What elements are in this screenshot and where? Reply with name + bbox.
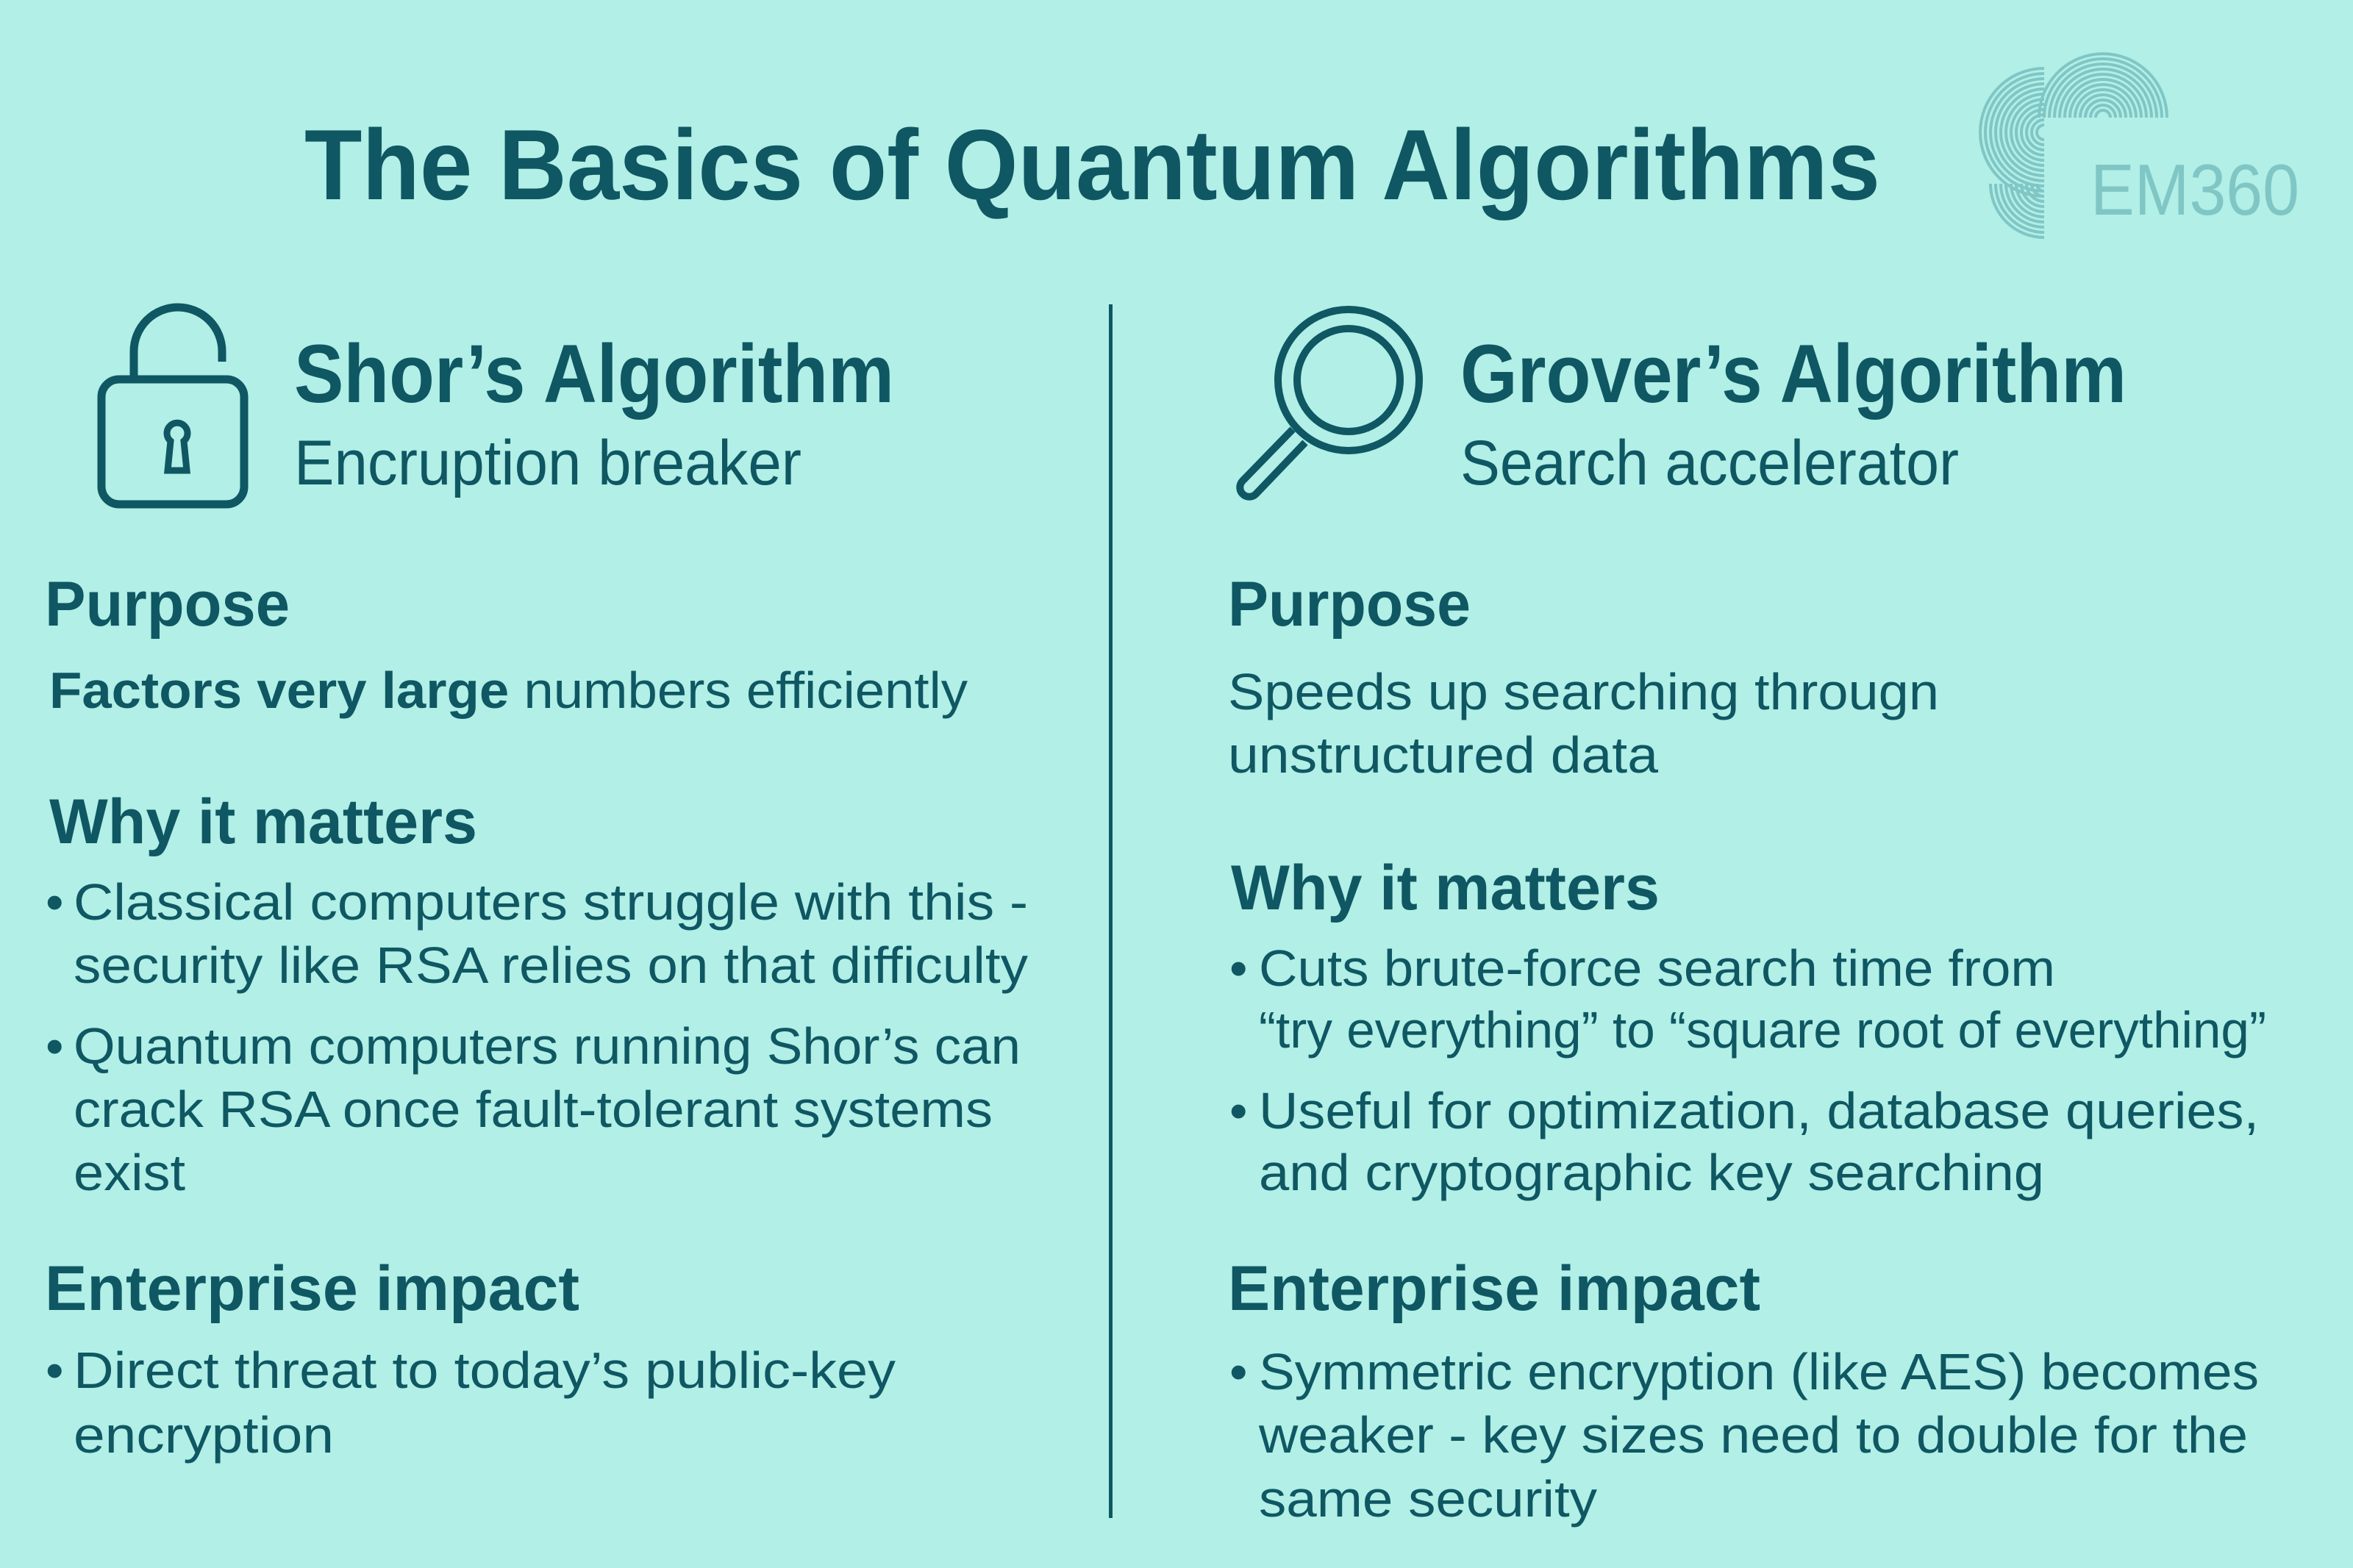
logo: EM360: EM360 bbox=[2090, 149, 2299, 230]
section: why it matters: and cryptographic key searching bbox=[1259, 1144, 2044, 1201]
section: why it matters: Cuts brute-force search time from bbox=[1259, 939, 2055, 997]
section: purpose: Speeds up searching througn bbox=[1228, 663, 1939, 720]
section: enterprise impact: Enterprise impact bbox=[1228, 1253, 1760, 1324]
section: enterprise impact: • bbox=[1229, 1343, 1248, 1400]
section: why it matters: exist bbox=[74, 1144, 185, 1201]
section: why it matters: Why it matters bbox=[1231, 853, 1660, 923]
section: why it matters: Quantum computers running Shor’s can bbox=[74, 1017, 1021, 1075]
section: purpose: Purpose bbox=[45, 569, 290, 640]
section: why it matters: • bbox=[46, 873, 64, 931]
section: enterprise impact: encryption bbox=[74, 1406, 334, 1464]
section: why it matters: crack RSA once fault-tolerant systems bbox=[74, 1081, 993, 1138]
panel: Shor's algorithm bbox=[45, 307, 1028, 1464]
divider bbox=[1109, 304, 1113, 1518]
title: The Basics of Quantum Algorithms bbox=[304, 109, 1880, 221]
heading: Shor's Algorithm: Shor’s Algorithm bbox=[294, 328, 894, 420]
section: why it matters: “try everything” to “square root of everything” bbox=[1259, 1001, 2266, 1059]
section: purpose: Factors very large numbers efficiently bbox=[49, 662, 968, 719]
section: enterprise impact: Symmetric encryption (like AES) becomes bbox=[1259, 1343, 2259, 1400]
section: why it matters: Useful for optimization, database queries, bbox=[1259, 1082, 2259, 1139]
section: why it matters: Why it matters bbox=[49, 787, 477, 857]
section: purpose bbox=[1228, 569, 1939, 784]
section: enterprise impact: • bbox=[46, 1342, 64, 1399]
section: purpose bbox=[45, 569, 968, 719]
section: enterprise impact: weaker - key sizes need to double for the bbox=[1258, 1406, 2248, 1464]
section: why it matters: • bbox=[1229, 939, 1248, 997]
section: enterprise impact: Direct threat to today’s public-key bbox=[74, 1342, 896, 1399]
subtitle: Encruption breaker bbox=[294, 428, 801, 498]
icon: open lock bbox=[101, 307, 244, 504]
section: why it matters: Classical computers struggle with this - bbox=[74, 873, 1028, 931]
section: why it matters: security like RSA relies on that difficulty bbox=[74, 937, 1028, 994]
section: why it matters: • bbox=[46, 1017, 64, 1075]
subtitle: Search accelerator bbox=[1460, 428, 1959, 498]
section: enterprise impact bbox=[1228, 1253, 2259, 1528]
section: enterprise impact: same security bbox=[1259, 1470, 1597, 1528]
panel: Grover's algorithm bbox=[1228, 309, 2266, 1528]
section: enterprise impact: Enterprise impact bbox=[45, 1253, 579, 1324]
section: purpose: unstructured data bbox=[1228, 726, 1658, 784]
logo: EM360 bbox=[1980, 54, 2299, 237]
section: why it matters bbox=[46, 787, 1028, 1201]
section: purpose: Purpose bbox=[1228, 569, 1471, 640]
section: why it matters: • bbox=[1229, 1082, 1248, 1139]
heading: Grover's Algorithm: Grover’s Algorithm bbox=[1460, 328, 2127, 420]
icon: magnifier bbox=[1240, 309, 1419, 497]
section: why it matters bbox=[1229, 853, 2266, 1201]
section: enterprise impact bbox=[45, 1253, 896, 1464]
